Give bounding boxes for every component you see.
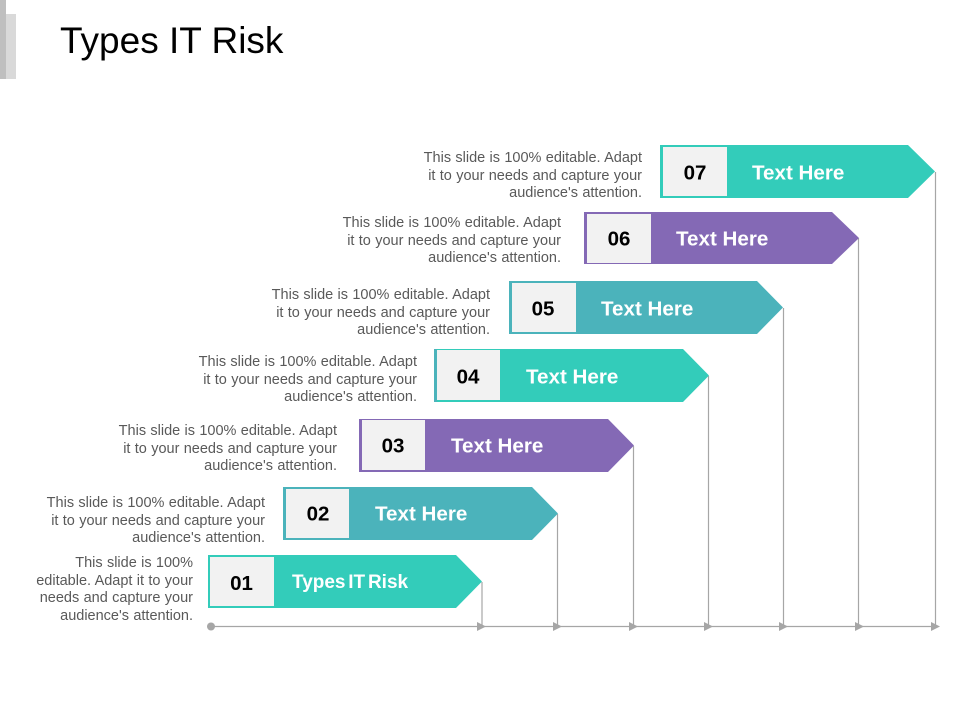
description 06 [342,215,561,266]
description 02 [46,495,265,546]
description 02: audience's attention. [132,530,265,546]
decorative corner tab [0,0,16,79]
description 03: it to your needs and capture your [123,440,337,456]
description 05: This slide is 100% editable. Adapt [272,287,490,303]
description 05 [272,287,490,338]
arrow bar 06: 06 [608,228,630,250]
description 07: audience's attention. [509,185,642,201]
description 01 [36,555,193,624]
arrow bar 01: Types IT Risk [292,572,409,593]
arrow bar 01 [208,555,482,608]
arrow bar 06 [584,212,859,264]
arrow bar 03 [359,419,634,472]
description 01: This slide is 100% [75,555,193,571]
arrow bar 05: 05 [532,298,554,320]
description 05: audience's attention. [357,322,490,338]
arrow bar 07: 07 [684,162,706,184]
arrow bar 04 [434,349,709,402]
arrow bar 03: 03 [382,434,404,458]
arrow bar 02 [283,487,558,540]
arrow bar 02: 02 [307,502,329,526]
description 03: audience's attention. [204,458,337,474]
description 05: it to your needs and capture your [276,304,490,320]
arrow bar 01: 01 [230,572,253,595]
description 02: This slide is 100% editable. Adapt [47,495,265,511]
description 07 [424,150,642,201]
description 04: This slide is 100% editable. Adapt [199,354,417,370]
arrow bar 03: Text Here [451,434,543,458]
arrow bar 07 [660,145,935,198]
arrow bar 05 [509,281,783,334]
timeline axis with arrows [207,172,940,631]
description 03: This slide is 100% editable. Adapt [119,423,337,439]
arrow bar 04: Text Here [526,366,618,388]
description 04 [198,354,417,405]
description 02: it to your needs and capture your [51,512,265,528]
description 07: This slide is 100% editable. Adapt [424,150,642,166]
description 01: editable. Adapt it to your [36,572,193,588]
description 01: audience's attention. [60,608,193,624]
arrow bar 07: Text Here [752,162,844,184]
arrow bar 06: Text Here [676,228,768,250]
arrow bar 05: Text Here [601,298,693,320]
description 04: audience's attention. [284,389,417,405]
description 03 [118,423,337,474]
arrow bar 02: Text Here [375,502,467,526]
description 04: it to your needs and capture your [203,372,417,388]
arrow bar 04: 04 [457,366,480,388]
description 07: it to your needs and capture your [428,168,642,184]
description 01: needs and capture your [40,590,193,606]
description 06: This slide is 100% editable. Adapt [343,215,561,231]
description 06: it to your needs and capture your [347,232,561,248]
title: Types IT Risk [60,20,283,61]
description 06: audience's attention. [428,250,561,266]
